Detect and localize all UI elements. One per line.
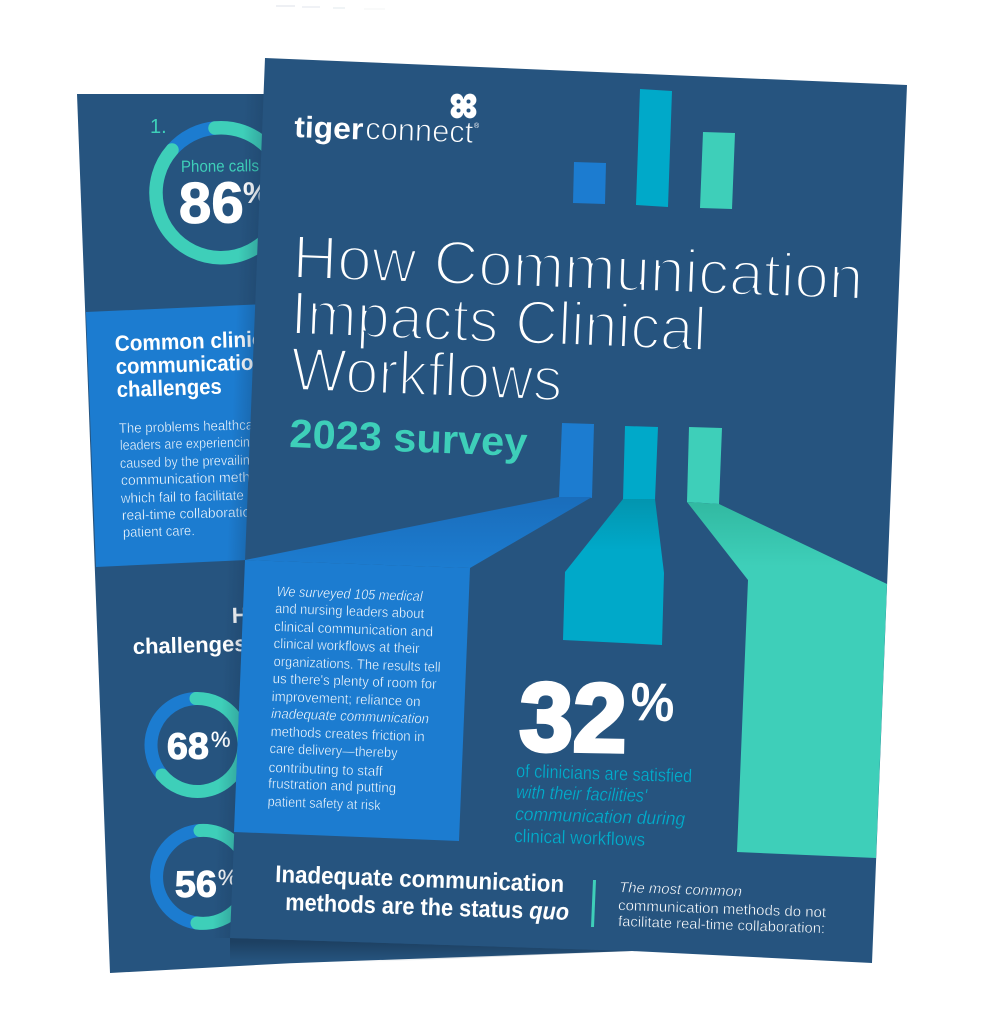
back panel: common clinical communication challenges: which fail to facilitate bbox=[120, 487, 244, 506]
back heading: challenges: How bbox=[231, 602, 279, 628]
panel: back sheet bbox=[77, 94, 640, 973]
back heading: challenges bbox=[132, 602, 324, 659]
ring chart: phone calls 86% bbox=[156, 128, 286, 258]
stat: 32%: % bbox=[630, 672, 675, 733]
stat caption: with their facilities' bbox=[516, 781, 649, 806]
back panel: common clinical communication challenges: leaders are experiencing bbox=[120, 433, 257, 453]
stat: 32% bbox=[514, 662, 692, 850]
panel: front sheet bbox=[230, 58, 907, 963]
intro text: methods creates friction in bbox=[270, 723, 425, 744]
intro text: contributing to staff bbox=[268, 759, 383, 779]
back panel: common clinical communication challenges: patient care. bbox=[123, 522, 195, 540]
green band bbox=[687, 427, 887, 858]
bar chart decoration bbox=[573, 89, 735, 209]
intro text: frustration and putting bbox=[268, 775, 396, 795]
heading: inadequate communication methods bbox=[275, 861, 570, 926]
intro text: care delivery—thereby bbox=[269, 740, 398, 760]
stat caption: communication during bbox=[515, 803, 686, 829]
back heading: challenges: challenges impact bbox=[132, 629, 324, 659]
blue band and intro panel bbox=[234, 423, 594, 841]
note text: The most common bbox=[619, 880, 742, 900]
title: Impacts Clinical bbox=[289, 279, 708, 365]
heading: inadequate communication methods: Inadequate communication bbox=[275, 861, 565, 898]
intro text bbox=[267, 583, 441, 813]
stat caption: clinical workflows bbox=[514, 825, 645, 850]
logo: tigerconnect: ® bbox=[474, 122, 480, 130]
logo: tigerconnect: tiger bbox=[294, 111, 364, 146]
subtitle: 2023 survey: 2023 survey bbox=[289, 412, 529, 465]
title: How Communication bbox=[291, 223, 865, 313]
back sheet number: 1. bbox=[150, 116, 167, 138]
title bbox=[289, 223, 865, 415]
teal band bbox=[563, 426, 664, 645]
shadow below front sheet bbox=[230, 938, 632, 968]
back panel: common clinical communication challenges: Common clinical bbox=[114, 326, 281, 356]
heading: inadequate communication methods: methods are the status quo bbox=[285, 889, 570, 926]
stat: 32%: 32 bbox=[519, 662, 628, 773]
logo: tigerconnect bbox=[294, 94, 480, 150]
back panel: common clinical communication challenges: communication methods bbox=[121, 468, 273, 488]
note text: communication methods do not bbox=[618, 898, 826, 921]
icon: logo cross bbox=[451, 94, 476, 118]
intro text: organizations. The results tell bbox=[273, 653, 441, 675]
ring chart: 56% bbox=[157, 830, 250, 923]
intro text: improvement; reliance on bbox=[271, 688, 421, 709]
ring chart: phone calls 86%: % bbox=[243, 177, 270, 210]
ring chart: 56%: 56 bbox=[175, 864, 217, 905]
note text: facilitate real-time collaboration: bbox=[618, 914, 825, 937]
intro text: patient safety at risk bbox=[267, 793, 382, 813]
back panel: common clinical communication challenges: caused by the prevailing bbox=[120, 451, 257, 471]
divider accent bbox=[591, 880, 596, 927]
title: Workflows bbox=[289, 335, 564, 415]
shadow of front sheet on back sheet bbox=[210, 94, 266, 938]
ring chart: 68% bbox=[151, 698, 244, 791]
intro text: clinical workflows at their bbox=[273, 635, 420, 656]
intro text: clinical communication and bbox=[274, 618, 433, 640]
back panel: common clinical communication challenges: communication bbox=[115, 349, 266, 379]
intro text: inadequate communication bbox=[271, 705, 430, 727]
back panel: common clinical communication challenges: The problems healthcare bbox=[119, 416, 265, 436]
back panel: common clinical communication challenges: real-time collaboration bbox=[122, 503, 258, 523]
ring chart: 68%: 68 bbox=[167, 726, 209, 767]
ring chart: 56%: % bbox=[218, 865, 238, 890]
intro text: We surveyed 105 medical bbox=[276, 583, 424, 604]
intro text: and nursing leaders about bbox=[275, 600, 424, 621]
ring chart: phone calls 86%: 86 bbox=[178, 170, 244, 236]
ring chart: phone calls 86%: Phone calls bbox=[181, 157, 259, 176]
ring chart: 68%: % bbox=[211, 727, 231, 752]
stat caption: of clinicians are satisfied bbox=[516, 760, 692, 786]
note text bbox=[618, 880, 826, 937]
faint marks above sheet bbox=[276, 6, 385, 9]
back panel: common clinical communication challenges: challenges bbox=[116, 374, 222, 402]
back panel: common clinical communication challenges bbox=[86, 303, 290, 567]
intro text: us there's plenty of room for bbox=[272, 670, 437, 692]
logo: tigerconnect: connect bbox=[365, 111, 474, 150]
stat caption bbox=[514, 760, 692, 850]
